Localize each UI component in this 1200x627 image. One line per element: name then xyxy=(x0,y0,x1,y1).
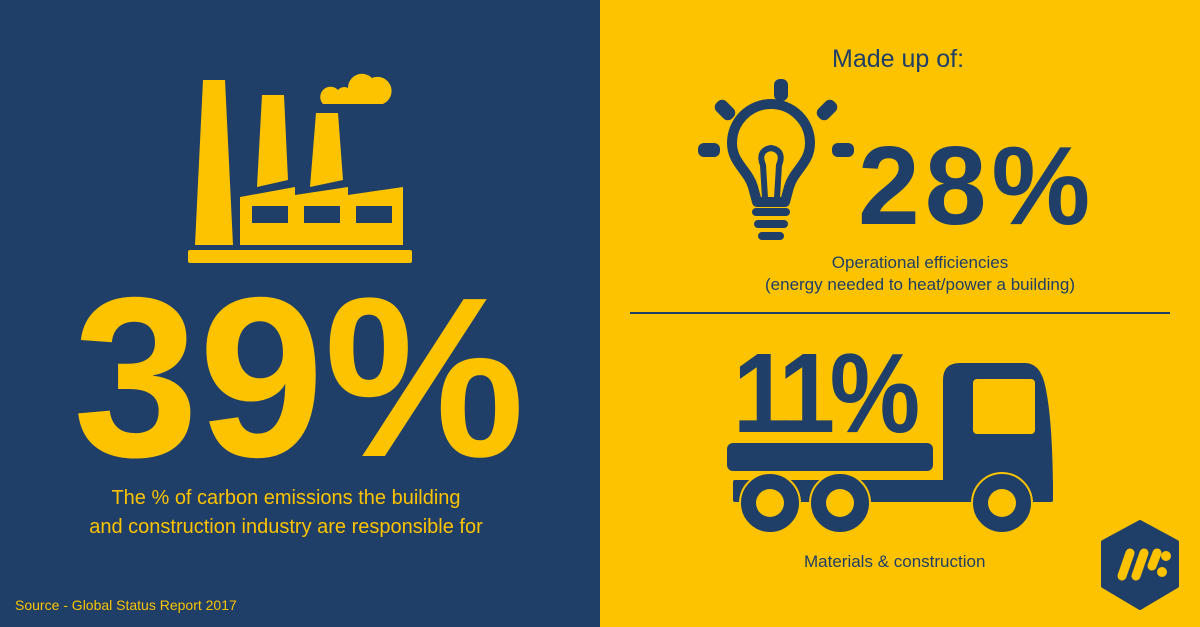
heading: Made up of: xyxy=(832,45,964,73)
stat 11%: 11% xyxy=(733,330,915,456)
description text: and construction industry are responsible for xyxy=(89,516,483,538)
icon: factory xyxy=(188,74,412,263)
icon: truck xyxy=(727,363,1053,532)
source: Source - Global Status Report 2017 xyxy=(15,597,237,613)
panel: right xyxy=(600,0,1200,627)
text: operational xyxy=(765,253,1075,294)
big stat 39%: 39% xyxy=(73,251,525,505)
divider xyxy=(630,312,1170,314)
text: materials: Materials & construction xyxy=(804,552,985,571)
stat 28%: 28% xyxy=(858,124,1095,248)
description text xyxy=(89,487,483,538)
icon: lightbulb xyxy=(698,79,854,240)
text: operational: (energy needed to heat/power a building) xyxy=(765,275,1075,294)
panel: left xyxy=(0,0,600,627)
logo xyxy=(1101,520,1179,610)
description text: The % of carbon emissions the building xyxy=(111,487,461,509)
text: operational: Operational efficiencies xyxy=(832,253,1008,272)
